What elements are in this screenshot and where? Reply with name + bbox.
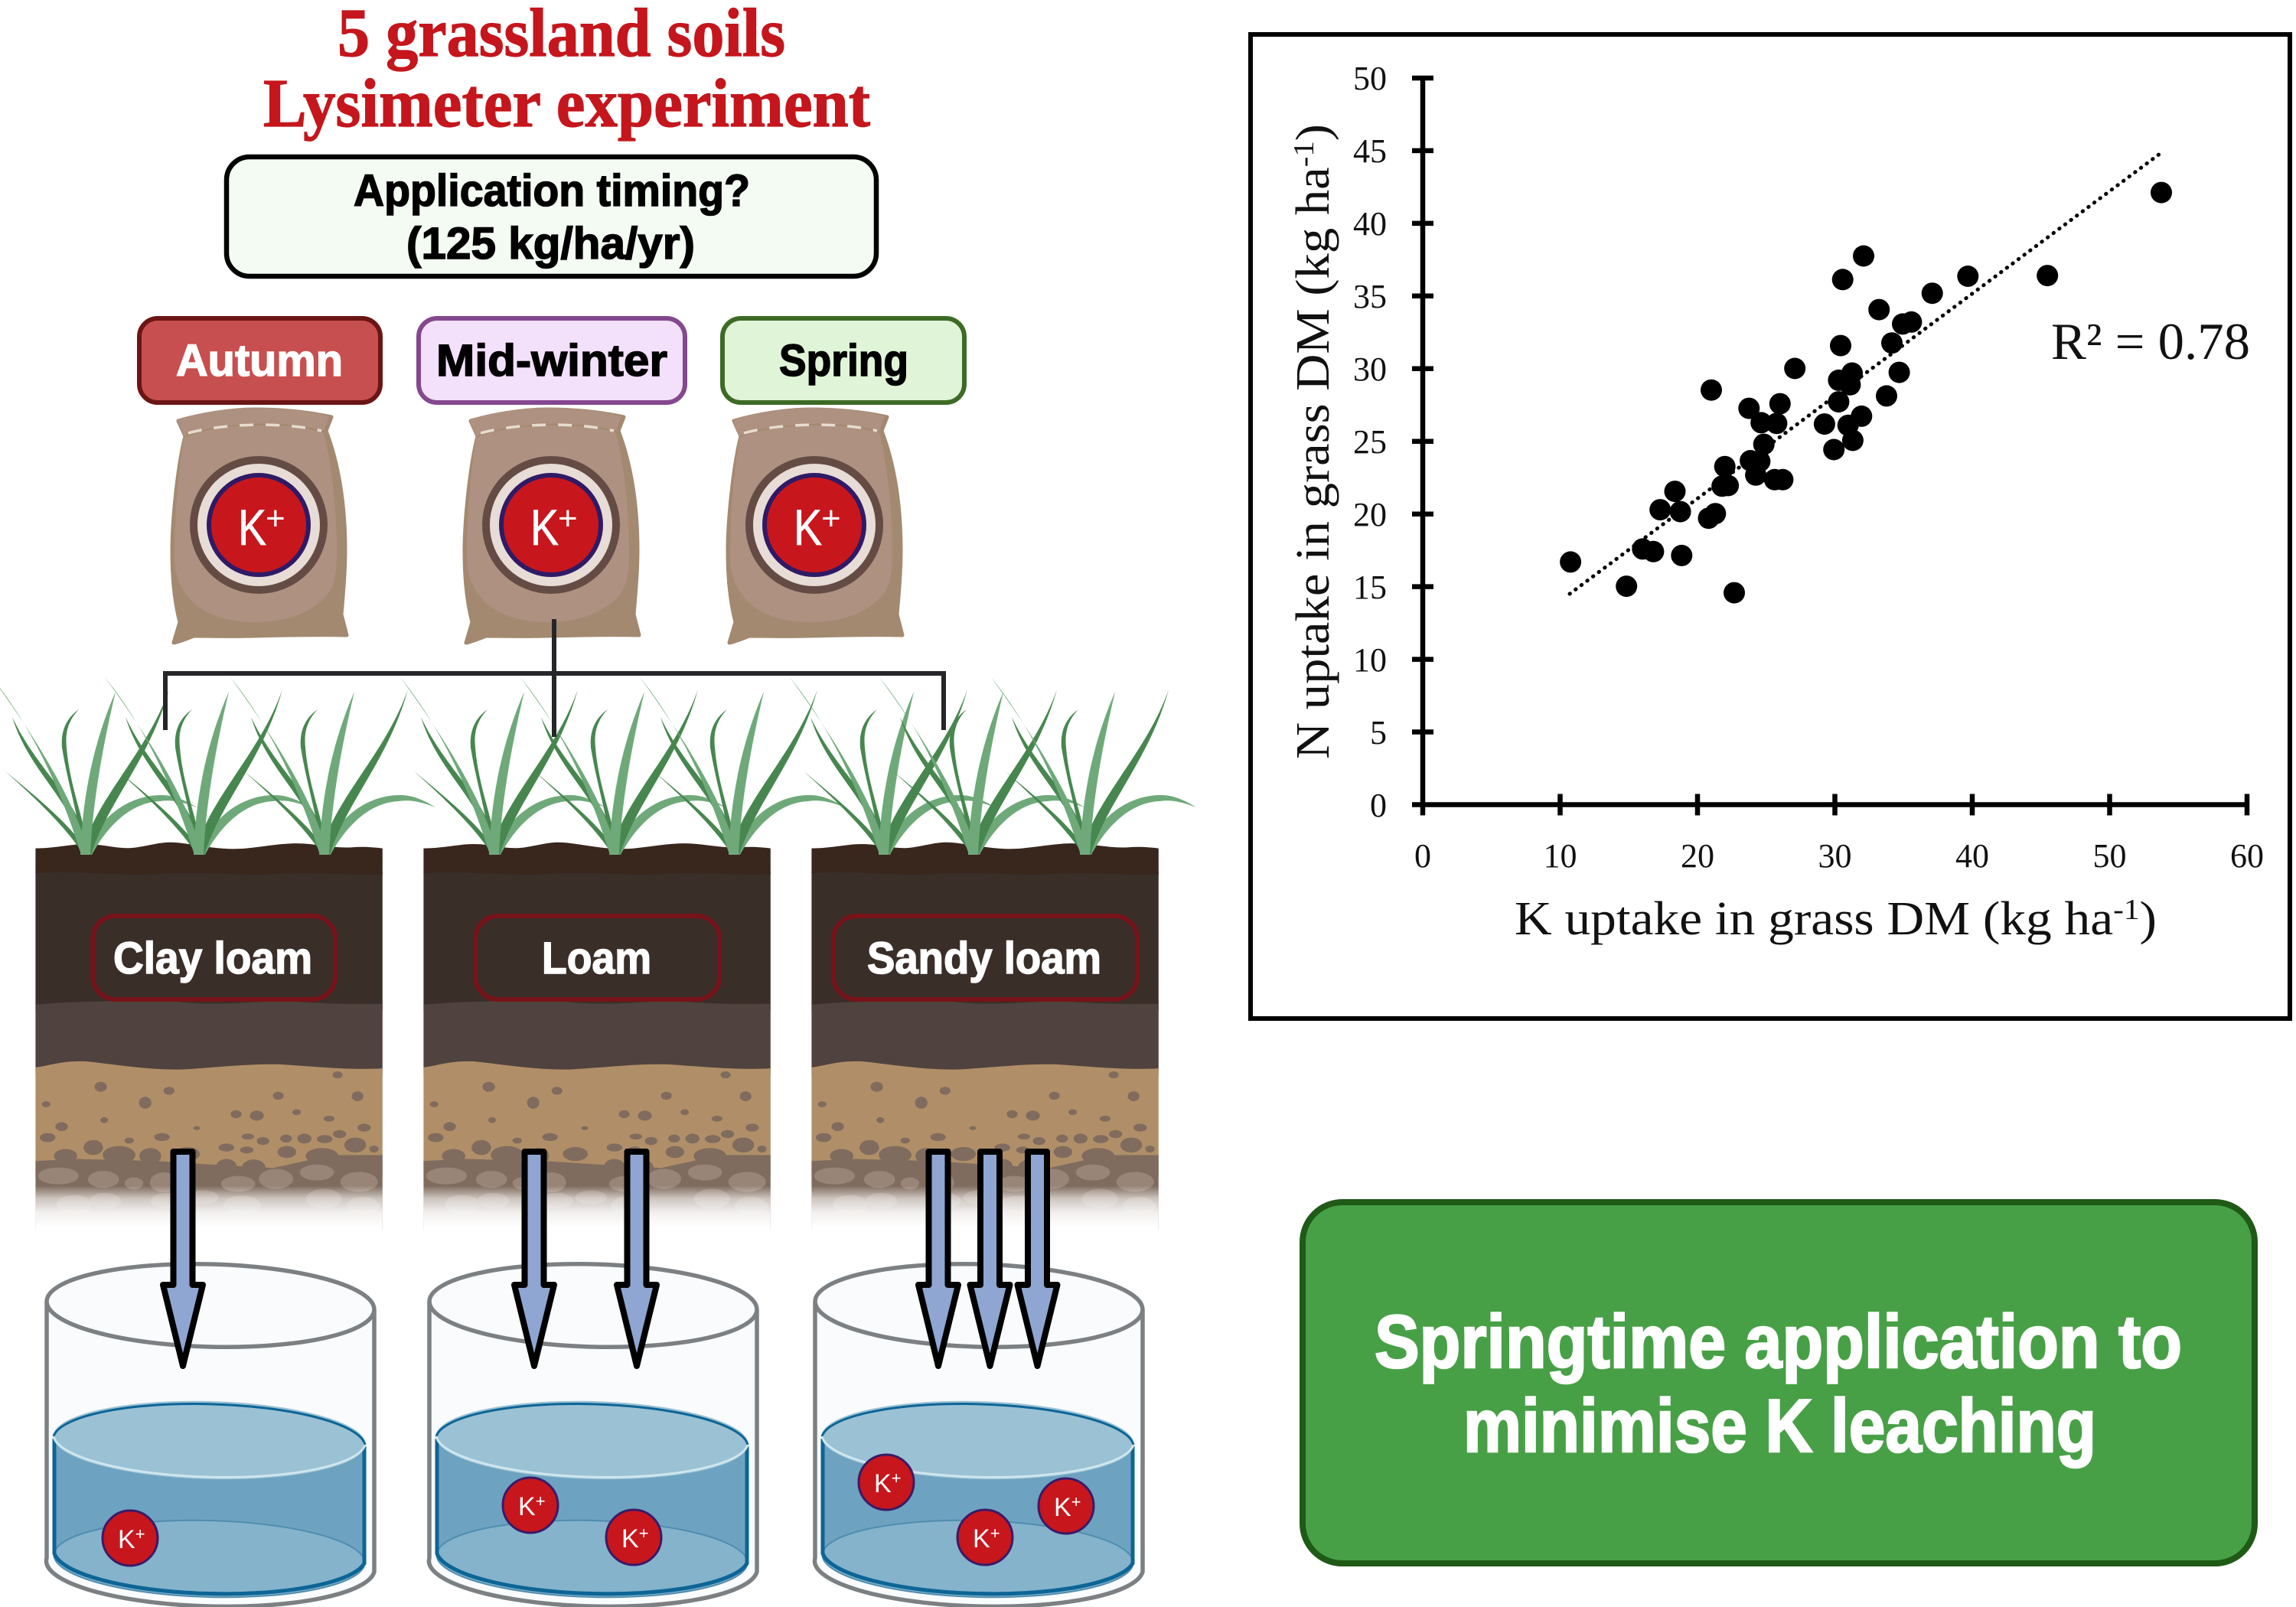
label: mid-winter <box>419 318 685 403</box>
x tick labels: 0 <box>1414 837 1431 875</box>
leaching ions K+: + <box>536 1491 546 1511</box>
soil column: loam: Loam <box>542 934 651 983</box>
leaching ions K+: + <box>639 1524 649 1543</box>
icon: fertiliser bag mid-winter <box>465 408 639 643</box>
y tick labels: 5 <box>1370 714 1387 751</box>
trend line <box>1570 153 2161 594</box>
application timing box <box>227 157 876 276</box>
icon: fertiliser bag autumn: K <box>238 499 266 556</box>
soil column: clay loam: Clay loam <box>113 934 312 983</box>
arrow: clay loam leaching <box>163 1152 203 1366</box>
leaching ions K+: + <box>892 1468 902 1488</box>
x tick labels: 60 <box>2230 837 2264 875</box>
x tick labels: 30 <box>1818 837 1852 875</box>
y tick labels: 0 <box>1370 787 1387 824</box>
axes <box>1412 78 2247 816</box>
x tick labels: 50 <box>2092 837 2126 875</box>
y axis title: -1 <box>1288 141 1320 167</box>
y axis title: N uptake in grass DM (kg ha <box>1287 208 1339 759</box>
y tick labels: 15 <box>1353 569 1387 606</box>
soil column: sandy loam: Sandy loam <box>867 934 1101 983</box>
data points <box>1560 182 2172 604</box>
x tick labels <box>1414 837 2264 875</box>
x tick labels: 10 <box>1543 837 1577 875</box>
leaching ion K+ <box>103 1511 158 1566</box>
icon: fertiliser bag spring: K <box>794 499 822 556</box>
leaching ion K+: + <box>135 1524 145 1543</box>
label: spring <box>722 318 964 403</box>
icon: fertiliser bag spring: + <box>821 500 841 537</box>
leaching ions K+: + <box>1071 1492 1081 1511</box>
x tick labels: 40 <box>1955 837 1989 875</box>
application timing box: Application timing? <box>354 166 750 216</box>
y tick labels: 25 <box>1353 423 1387 461</box>
y tick labels: 20 <box>1353 496 1387 533</box>
title <box>263 0 870 142</box>
lysimeter beaker: loam <box>429 1260 758 1606</box>
label: mid-winter: Mid-winter <box>436 336 667 386</box>
leaching ions K+: K <box>1054 1493 1071 1522</box>
y tick labels: 10 <box>1353 641 1387 679</box>
y tick labels <box>1353 60 1387 824</box>
x axis title: ) <box>2140 893 2157 945</box>
y tick labels: 45 <box>1353 132 1387 170</box>
soil column: clay loam <box>35 843 383 1231</box>
icon: fertiliser bag autumn: + <box>266 500 285 537</box>
icon: fertiliser bag autumn <box>172 408 347 643</box>
soil column: loam <box>423 843 771 1231</box>
lysimeter beaker: clay loam <box>46 1260 375 1606</box>
label: autumn <box>139 318 380 403</box>
y tick labels: 35 <box>1353 278 1387 315</box>
panel: scatter chart <box>1251 34 2290 1019</box>
label: spring: Spring <box>779 336 908 386</box>
leaching ions K+: + <box>990 1524 1000 1543</box>
y tick labels: 50 <box>1353 60 1387 97</box>
leaching ion K+: K <box>118 1525 135 1554</box>
leaching ions K+ <box>859 1455 1094 1565</box>
lysimeter beaker: sandy loam <box>814 1260 1143 1606</box>
r-squared annotation: R² = 0.78 <box>2051 312 2250 370</box>
leaching ions K+: K <box>621 1524 639 1553</box>
icon: fertiliser bag spring <box>728 408 902 643</box>
leaching ions K+: K <box>973 1524 990 1553</box>
y tick labels: 40 <box>1353 205 1387 243</box>
soil column: sandy loam <box>811 843 1159 1231</box>
connector from bags to soils <box>165 619 944 737</box>
leaching ions K+: K <box>874 1469 892 1498</box>
label: autumn: Autumn <box>176 336 343 386</box>
leaching ions K+ <box>503 1478 661 1565</box>
icon: fertiliser bag mid-winter: + <box>558 500 578 537</box>
y axis title: ) <box>1287 124 1339 141</box>
x axis title: K uptake in grass DM (kg ha <box>1515 893 2066 945</box>
title: Lysimeter experiment <box>263 66 870 142</box>
conclusion box <box>1303 1202 2255 1563</box>
x tick labels: 20 <box>1681 837 1714 875</box>
arrows: loam leaching <box>514 1152 657 1366</box>
conclusion box: Springtime application to <box>1375 1299 2182 1384</box>
y tick labels: 30 <box>1353 350 1387 388</box>
conclusion box: minimise K leaching <box>1463 1384 2096 1468</box>
x axis title: -1 <box>2113 894 2140 926</box>
icon: fertiliser bag mid-winter: K <box>530 499 559 556</box>
leaching ions K+: K <box>518 1492 536 1521</box>
arrows: sandy loam leaching <box>918 1152 1058 1366</box>
application timing box: (125 kg/ha/yr) <box>406 219 695 269</box>
grass tufts <box>0 677 1196 855</box>
